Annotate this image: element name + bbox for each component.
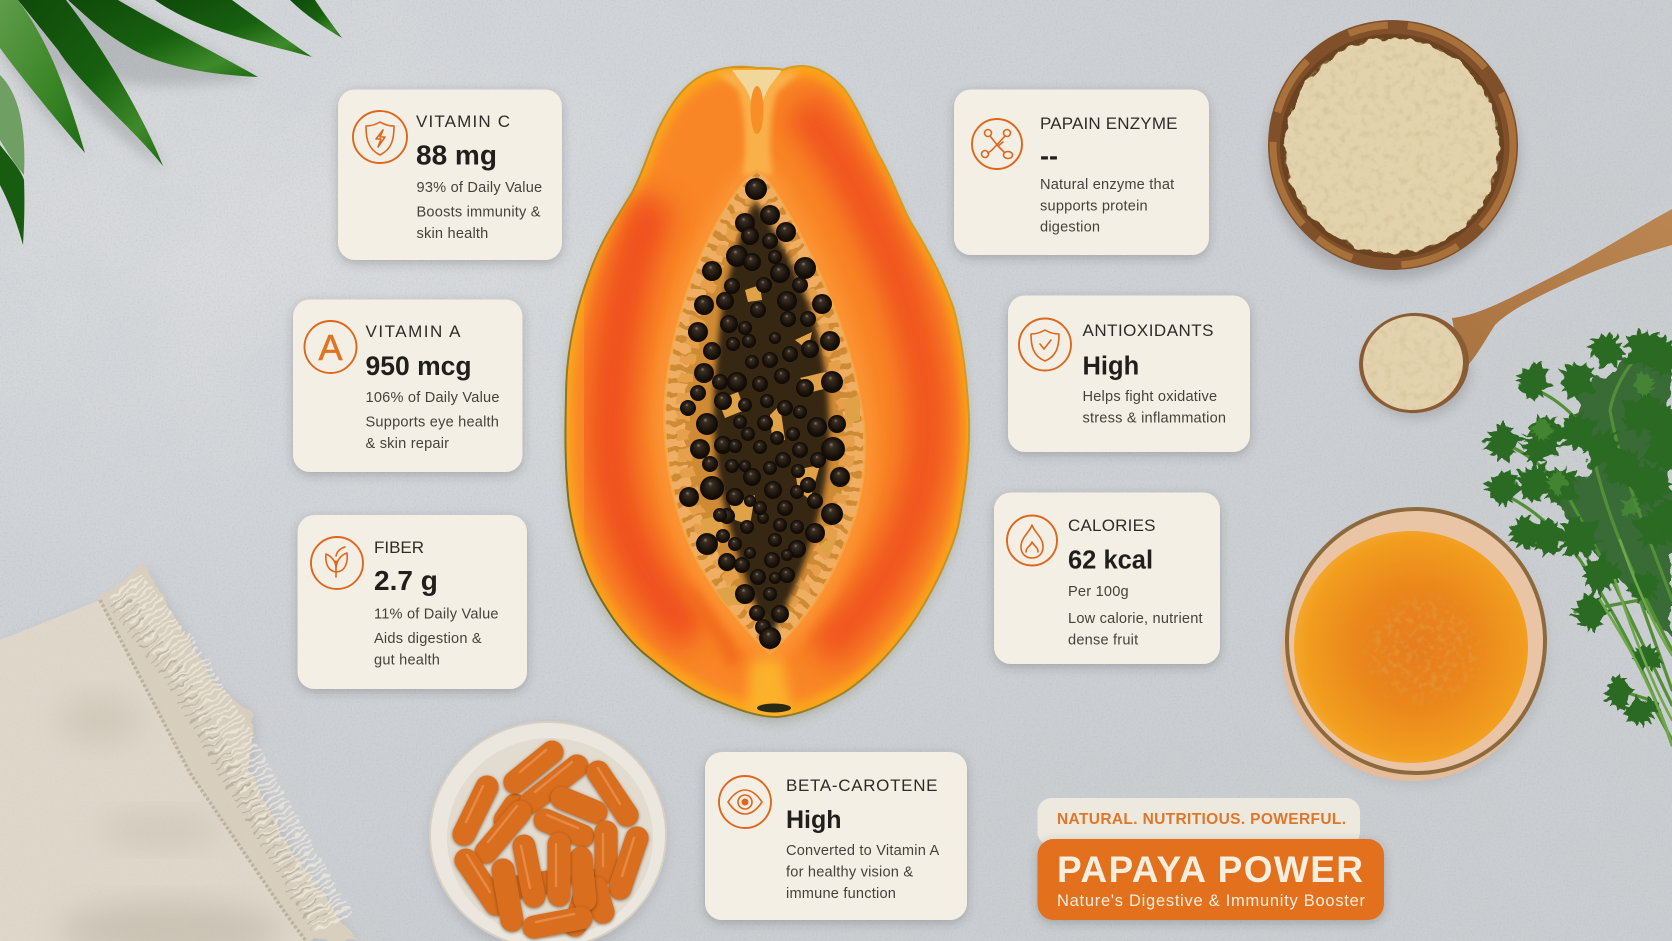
text: Antioxidants: ANTIOXIDANTS: [1082, 321, 1214, 340]
icon: leaf sprout: [311, 537, 363, 589]
text: Vitamin C: 88 mg: [416, 140, 497, 170]
text: Vitamin A: VITAMIN A: [366, 322, 461, 341]
linen cloth: [0, 563, 357, 941]
icon: letter A: A: [318, 327, 343, 368]
text: Fiber: Aids digestion &: [374, 631, 482, 647]
tagline pill: [1038, 798, 1360, 846]
text: Vitamin C: [416, 112, 542, 242]
text: Fiber: FIBER: [374, 538, 424, 557]
text: Antioxidants: stress & inflammation: [1082, 410, 1226, 426]
text: Fiber: 2.7 g: [374, 565, 438, 596]
text: Calories: Low calorie, nutrient: [1068, 611, 1203, 627]
card: Calories: [994, 492, 1220, 664]
text: Beta-carotene: for healthy vision &: [786, 864, 913, 880]
icon: enzyme molecule: [972, 119, 1022, 169]
icon: letter A: [304, 321, 356, 373]
text: Papain enzyme: --: [1040, 141, 1058, 171]
text: Antioxidants: [1082, 321, 1226, 426]
card: Vitamin A: [293, 300, 522, 472]
wooden spoon with powder: [1353, 209, 1672, 420]
text: Papain enzyme: PAPAIN ENZYME: [1040, 114, 1178, 133]
card: Beta-carotene: [705, 752, 967, 920]
glass of papaya juice: [1282, 509, 1548, 785]
text: Calories: dense fruit: [1068, 632, 1138, 648]
card: Papain enzyme: [954, 90, 1209, 255]
tagline pill: NATURAL. NUTRITIOUS. POWERFUL.: [1057, 811, 1346, 828]
card: Antioxidants: [1008, 296, 1250, 452]
parsley bunch: [1479, 317, 1672, 745]
text: Calories: CALORIES: [1068, 516, 1156, 535]
card: Fiber: [298, 515, 527, 689]
text: Fiber: [374, 538, 499, 668]
text: Vitamin A: [366, 322, 500, 452]
text: Beta-carotene: BETA-CAROTENE: [786, 776, 938, 795]
text: Antioxidants: Helps fight oxidative: [1082, 389, 1217, 405]
icon: shield with check: [1019, 318, 1071, 370]
text: Antioxidants: High: [1082, 352, 1139, 380]
text: Fiber: gut health: [374, 652, 440, 668]
title banner: [1038, 798, 1384, 920]
text: Vitamin A: Supports eye health: [366, 414, 499, 430]
text: Beta-carotene: High: [786, 806, 842, 834]
text: Calories: 62 kcal: [1068, 546, 1153, 574]
text: Vitamin A: 950 mcg: [366, 351, 472, 381]
text: Vitamin C: skin health: [416, 226, 488, 242]
text: Papain enzyme: Natural enzyme that: [1040, 177, 1174, 193]
capsule bowl: [430, 722, 666, 941]
text: Fiber: 11% of Daily Value: [374, 606, 499, 622]
text: Beta-carotene: immune function: [786, 886, 896, 902]
text: Vitamin C: 93% of Daily Value: [416, 180, 542, 196]
text: Vitamin A: 106% of Daily Value: [366, 390, 500, 406]
text: Vitamin C: VITAMIN C: [416, 112, 510, 131]
icon: flame: [1007, 516, 1057, 566]
text: Beta-carotene: [786, 776, 939, 902]
icon: shield with lightning bolt: [353, 111, 407, 163]
text: Papain enzyme: supports protein: [1040, 198, 1148, 214]
title block: Nature's Digestive & Immunity Booster: [1057, 892, 1366, 910]
title block: [1038, 839, 1384, 920]
wooden bowl of papaya powder: [1267, 20, 1519, 279]
text: Beta-carotene: Converted to Vitamin A: [786, 843, 939, 859]
papaya fruit: [560, 60, 975, 721]
text: Papain enzyme: [1040, 114, 1178, 236]
icon: eye: [719, 776, 771, 828]
title block: PAPAYA POWER: [1057, 849, 1363, 890]
palm leaves: [0, 0, 342, 245]
card: Vitamin C: [338, 90, 562, 260]
text: Vitamin C: Boosts immunity &: [416, 204, 541, 220]
text: Papain enzyme: digestion: [1040, 220, 1100, 236]
text: Vitamin A: & skin repair: [366, 436, 449, 452]
text: Calories: [1068, 516, 1203, 648]
text: Calories: Per 100g: [1068, 584, 1129, 600]
